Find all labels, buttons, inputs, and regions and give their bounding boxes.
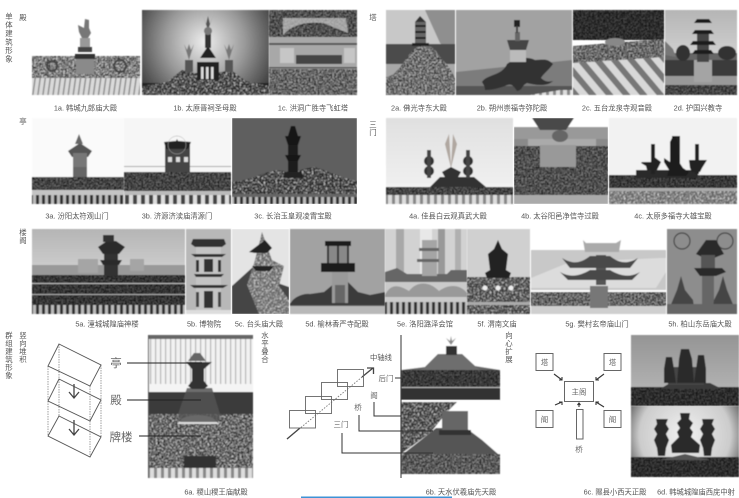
leader lines xyxy=(127,363,202,436)
photo 4b xyxy=(514,118,608,204)
captions row 1 xyxy=(54,104,722,112)
side label: single building image: 象 xyxy=(5,54,13,64)
photo 1c xyxy=(269,10,357,95)
photo 3c xyxy=(232,118,357,204)
captions 6c and 6d: 6d. 韩城城隍庙西庑中射 xyxy=(657,488,735,496)
category label: three gates xyxy=(369,120,377,137)
diagram: horizontal overlay sketch: 中轴线 xyxy=(370,353,393,362)
category label: tower: 楼 xyxy=(19,228,27,237)
label: pavilion: 亭 xyxy=(110,356,122,370)
photo 1b xyxy=(142,10,269,95)
diagram: vertical stacking sketch xyxy=(48,344,101,457)
category label: three gates: 三 xyxy=(369,120,377,129)
captions row 3: 5g. 樊村玄帝庙山门 xyxy=(565,320,629,328)
captions row 3: 5f. 渭南文庙 xyxy=(477,320,517,328)
bottom blue line xyxy=(301,496,452,498)
photo 6c xyxy=(631,335,739,406)
category label: vertical stacking xyxy=(19,331,27,364)
captions row 2: 3b. 济源济渎庙清源门 xyxy=(142,212,212,220)
category label: horizontal overlay xyxy=(261,331,269,364)
captions row 2: 3a. 汾阳太符观山门 xyxy=(45,212,109,220)
label: hall: 殿 xyxy=(110,394,122,407)
category label: hall: 殿 xyxy=(19,13,27,22)
caption 6b: 6b. 天水伏羲庙先天殿 xyxy=(426,488,497,496)
captions row 2: 4c. 太原多福寺大雄宝殿 xyxy=(634,212,712,220)
captions row 1: 2d. 护国兴教寺 xyxy=(674,104,722,112)
photo 5e xyxy=(385,229,467,314)
side label: group building image: 筑 xyxy=(5,355,13,364)
category label: centripetal expansion: 心 xyxy=(505,339,513,348)
photo 5h xyxy=(667,229,737,314)
captions row 3: 5e. 洛阳潞泽会馆 xyxy=(397,320,453,328)
diagram: centripetal expansion: 阁 xyxy=(609,414,616,424)
side label: single building image: 单 xyxy=(5,12,13,21)
category label: centripetal expansion: 展 xyxy=(505,355,513,364)
photo 5g xyxy=(531,229,666,314)
side label: group building image xyxy=(5,331,13,380)
captions row 3: 5c. 台头庙大殿 xyxy=(235,320,284,328)
side label: group building image: 象 xyxy=(5,371,13,380)
photo 4c xyxy=(609,118,737,204)
captions row 3 xyxy=(75,320,732,328)
captions row 1: 1b. 太原晋祠圣母殿 xyxy=(173,104,237,112)
captions row 3: 5h. 柏山东岳庙大殿 xyxy=(668,320,732,328)
captions row 1: 2b. 朔州崇福寺弥陀殿 xyxy=(477,104,548,112)
category label: vertical stacking: 堆 xyxy=(19,347,27,356)
captions row 1: 2c. 五台龙泉寺观音殿 xyxy=(582,104,653,112)
leader lines to photo 6b xyxy=(342,335,433,478)
diagram: centripetal expansion: 桥 xyxy=(575,444,583,454)
diagram: centripetal expansion: 主阁 xyxy=(572,386,586,396)
photo 5d xyxy=(290,229,385,314)
category label: horizontal overlay: 叠 xyxy=(261,347,269,356)
photo 4a xyxy=(386,118,513,204)
photo 2b xyxy=(456,10,572,95)
captions row 3: 5a. 潼城城隍庙神楼 xyxy=(75,320,139,328)
category label: centripetal expansion: 向 xyxy=(505,331,513,340)
captions 6c and 6d xyxy=(584,488,735,496)
side label: group building image: 建 xyxy=(5,347,13,356)
diagram: horizontal overlay sketch: 桥 xyxy=(354,402,362,412)
photo 3b xyxy=(124,118,231,204)
photo 3a xyxy=(32,118,124,204)
photo 6d xyxy=(631,406,739,477)
captions row 2 xyxy=(45,212,712,220)
captions row 1: 1c. 洪洞广胜寺飞虹塔 xyxy=(278,104,349,112)
photo 6b lower xyxy=(401,400,500,474)
category label: vertical stacking: 积 xyxy=(19,355,27,364)
side label: single building image: 体 xyxy=(5,20,13,30)
category label: vertical stacking: 向 xyxy=(19,339,27,348)
category label: horizontal overlay: 水 xyxy=(261,331,269,340)
side label: single building image xyxy=(5,12,13,64)
captions row 1: 2a. 佛光寺东大殿 xyxy=(391,104,448,112)
diagram: horizontal overlay sketch: 后门 xyxy=(378,373,394,383)
photo 2a xyxy=(386,10,455,95)
photo 5f xyxy=(467,229,530,314)
captions row 2: 4a. 佳县白云观真武大殿 xyxy=(409,212,488,220)
category label: tower xyxy=(19,228,27,245)
photo 1a xyxy=(32,19,140,95)
captions row 3: 5b. 博物院 xyxy=(187,320,222,328)
caption 6a: 6a. 稷山稷王庙献殿 xyxy=(184,488,248,496)
diagram: centripetal expansion xyxy=(536,354,621,454)
side label: group building image: 组 xyxy=(5,339,13,348)
category label: pagoda: 塔 xyxy=(369,13,377,22)
photo 2d xyxy=(665,10,737,95)
label: archway: 牌楼 xyxy=(110,430,133,444)
category label: horizontal overlay: 合 xyxy=(261,355,269,364)
diagram: centripetal expansion: 塔 xyxy=(541,357,549,367)
category label: centripetal expansion xyxy=(505,331,513,364)
photo 5c xyxy=(232,229,289,314)
captions row 2: 4b. 太谷阳邑净信寺过殿 xyxy=(521,212,600,220)
photo 5b xyxy=(186,229,231,314)
diagram: horizontal overlay sketch xyxy=(287,353,394,439)
category label: tower: 阁 xyxy=(19,236,27,245)
diagram: centripetal expansion: 阁 xyxy=(541,414,548,424)
side label: group building image: 形 xyxy=(5,363,13,372)
side label: single building image: 筑 xyxy=(5,38,13,46)
photo 6a xyxy=(148,335,253,478)
captions row 1: 1a. 韩城九郎庙大殿 xyxy=(54,104,118,112)
diagram: horizontal overlay sketch: 三门 xyxy=(334,420,348,429)
category label: horizontal overlay: 平 xyxy=(261,339,269,348)
photo 5a xyxy=(32,229,185,314)
category label: vertical stacking: 竖 xyxy=(19,331,27,340)
photo 2c xyxy=(573,10,664,95)
captions row 3: 5d. 榆林香严寺配殿 xyxy=(305,320,369,328)
photo 6b upper xyxy=(401,335,500,400)
category label: pavilion: 亭 xyxy=(19,117,27,126)
diagram: centripetal expansion: 塔 xyxy=(609,357,617,367)
captions 6c and 6d: 6c. 隰县小西天正殿 xyxy=(584,488,647,496)
captions row 2: 3c. 长治玉皇观凌霄宝殿 xyxy=(254,212,332,220)
side label: single building image: 形 xyxy=(5,46,13,55)
category label: three gates: 门 xyxy=(369,128,377,137)
diagram: horizontal overlay sketch: 阁 xyxy=(370,390,378,400)
category label: centripetal expansion: 扩 xyxy=(505,347,513,356)
side label: single building image: 建 xyxy=(5,29,13,38)
side label: group building image: 群 xyxy=(5,331,13,340)
